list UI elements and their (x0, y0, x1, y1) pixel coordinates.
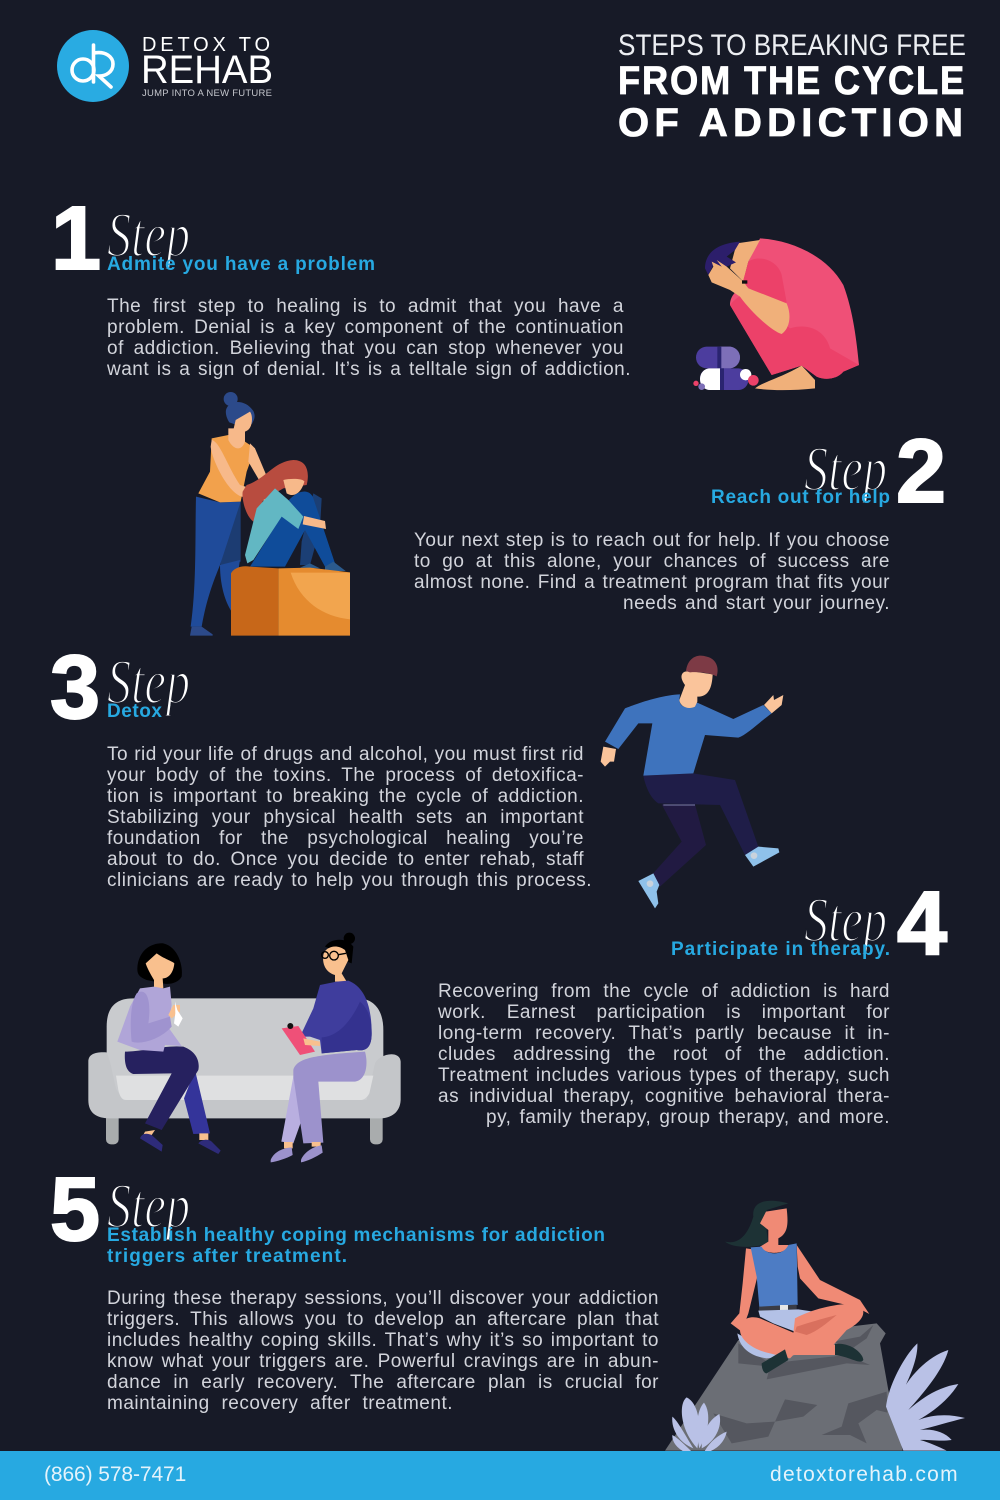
step 3 text: To rid your life of drugs and alcohol, you must first rid (107, 744, 584, 765)
step 5 text: triggers. This allows you to develop an aftercare plan that (107, 1309, 659, 1330)
step 3 heading: Detox (107, 701, 162, 722)
step 1 text: want is a sign of denial. It’s is a telltale sign of addiction. (107, 359, 631, 380)
step 2 text: to go at this alone, your chances of success are (414, 551, 890, 572)
illustration: woman comforting friend on a box (190, 392, 350, 636)
step 1 text: of addiction. Believing that you can stop whenever you (107, 338, 624, 359)
step 4 text: cludes addressing the root of the addiction. (438, 1044, 890, 1065)
panel: step 5 (50, 1165, 659, 1414)
step 4 text: Treatment includes various types of therapy, such (438, 1065, 890, 1086)
logo wordmark: REHAB (141, 48, 273, 92)
step 5 heading: Step (107, 1170, 190, 1241)
step 5 heading: triggers after treatment. (107, 1246, 347, 1267)
title (618, 29, 966, 145)
step 5 heading (50, 1165, 605, 1267)
logo wordmark: JUMP INTO A NEW FUTURE (142, 88, 272, 99)
step 2 text (414, 530, 890, 614)
step 5 text: During these therapy sessions, you’ll discover your addiction (107, 1288, 659, 1309)
step 2 heading (711, 430, 946, 510)
step 1 text (107, 296, 631, 380)
logo (57, 30, 273, 102)
step 5 text: maintaining recovery after treatment. (107, 1393, 453, 1414)
step 5 text: dance in early recovery. The aftercare plan is crucial for (107, 1372, 659, 1393)
step 2 text: almost none. Find a treatment program that fits your (414, 572, 890, 593)
step 3 text: about to do. Once you decide to enter rehab, staff (107, 849, 584, 870)
logo wordmark (141, 34, 273, 99)
footer bar (0, 1451, 1000, 1500)
step 5 heading: Establish healthy coping mechanisms for addiction (107, 1225, 605, 1246)
step 2 heading: Step (804, 433, 887, 504)
step 4 text: Recovering from the cycle of addiction is hard (438, 981, 890, 1002)
panel: step 4 (438, 880, 948, 1128)
panel: step 2 (414, 430, 946, 614)
step 4 text: work. Earnest participation is important for (438, 1002, 890, 1023)
step 1 heading (51, 200, 375, 280)
logo badge (57, 30, 129, 102)
illustration: woman meditating on a rock (665, 1200, 965, 1451)
panel: step 1 (51, 200, 631, 380)
step 4 text: py, family therapy, group therapy, and more. (486, 1107, 890, 1128)
title: OF ADDICTION (618, 101, 963, 145)
step 5 text: includes healthy coping skills. That’s why it’s so important to (107, 1330, 659, 1351)
step 4 heading (671, 880, 948, 960)
step 5 text: know what your triggers are. Powerful cravings are in abun- (107, 1351, 659, 1372)
illustration: man jumping forward (600, 656, 784, 908)
step 1 heading: Step (107, 200, 190, 270)
step 3 heading (50, 645, 190, 725)
step 4 text: long-term recovery. That’s partly because it in- (438, 1023, 890, 1044)
illustration: person with head in hands and pills (693, 238, 859, 390)
step 3 text: your body of the toxins. The process of detoxifica- (107, 765, 584, 786)
step 4 heading: Step (804, 884, 887, 955)
website: detoxtorehab.com (770, 1463, 959, 1486)
illustration: two women on a sofa in therapy (88, 932, 401, 1162)
logo wordmark: DETOX TO (142, 34, 270, 56)
step 1 text: problem. Denial is a key component of the continuation (107, 317, 624, 338)
step 2 text: needs and start your journey. (623, 593, 890, 614)
panel: step 3 (50, 645, 592, 891)
step 4 text (438, 981, 890, 1128)
phone number: (866) 578-7471 (44, 1463, 186, 1486)
step 3 text (107, 744, 592, 891)
step 3 heading: Step (107, 646, 190, 717)
step 3 text: clinicians are ready to help you through this process. (107, 870, 592, 891)
step 3 text: tion is important to breaking the cycle of addiction. (107, 786, 584, 807)
step 1 text: The first step to healing is to admit that you have a (107, 296, 624, 317)
step 2 heading: Reach out for help (711, 487, 890, 508)
step 2 text: Your next step is to reach out for help. If you choose (414, 530, 890, 551)
step 3 text: Stabilizing your physical health sets an important (107, 807, 584, 828)
step 1 heading: Admite you have a problem (107, 254, 375, 275)
step 5 text (107, 1288, 659, 1414)
step 4 heading: Participate in therapy. (671, 939, 890, 960)
step 3 text: foundation for the psychological healing you’re (107, 828, 584, 849)
step 4 text: as individual therapy, cognitive behavioral thera- (438, 1086, 890, 1107)
